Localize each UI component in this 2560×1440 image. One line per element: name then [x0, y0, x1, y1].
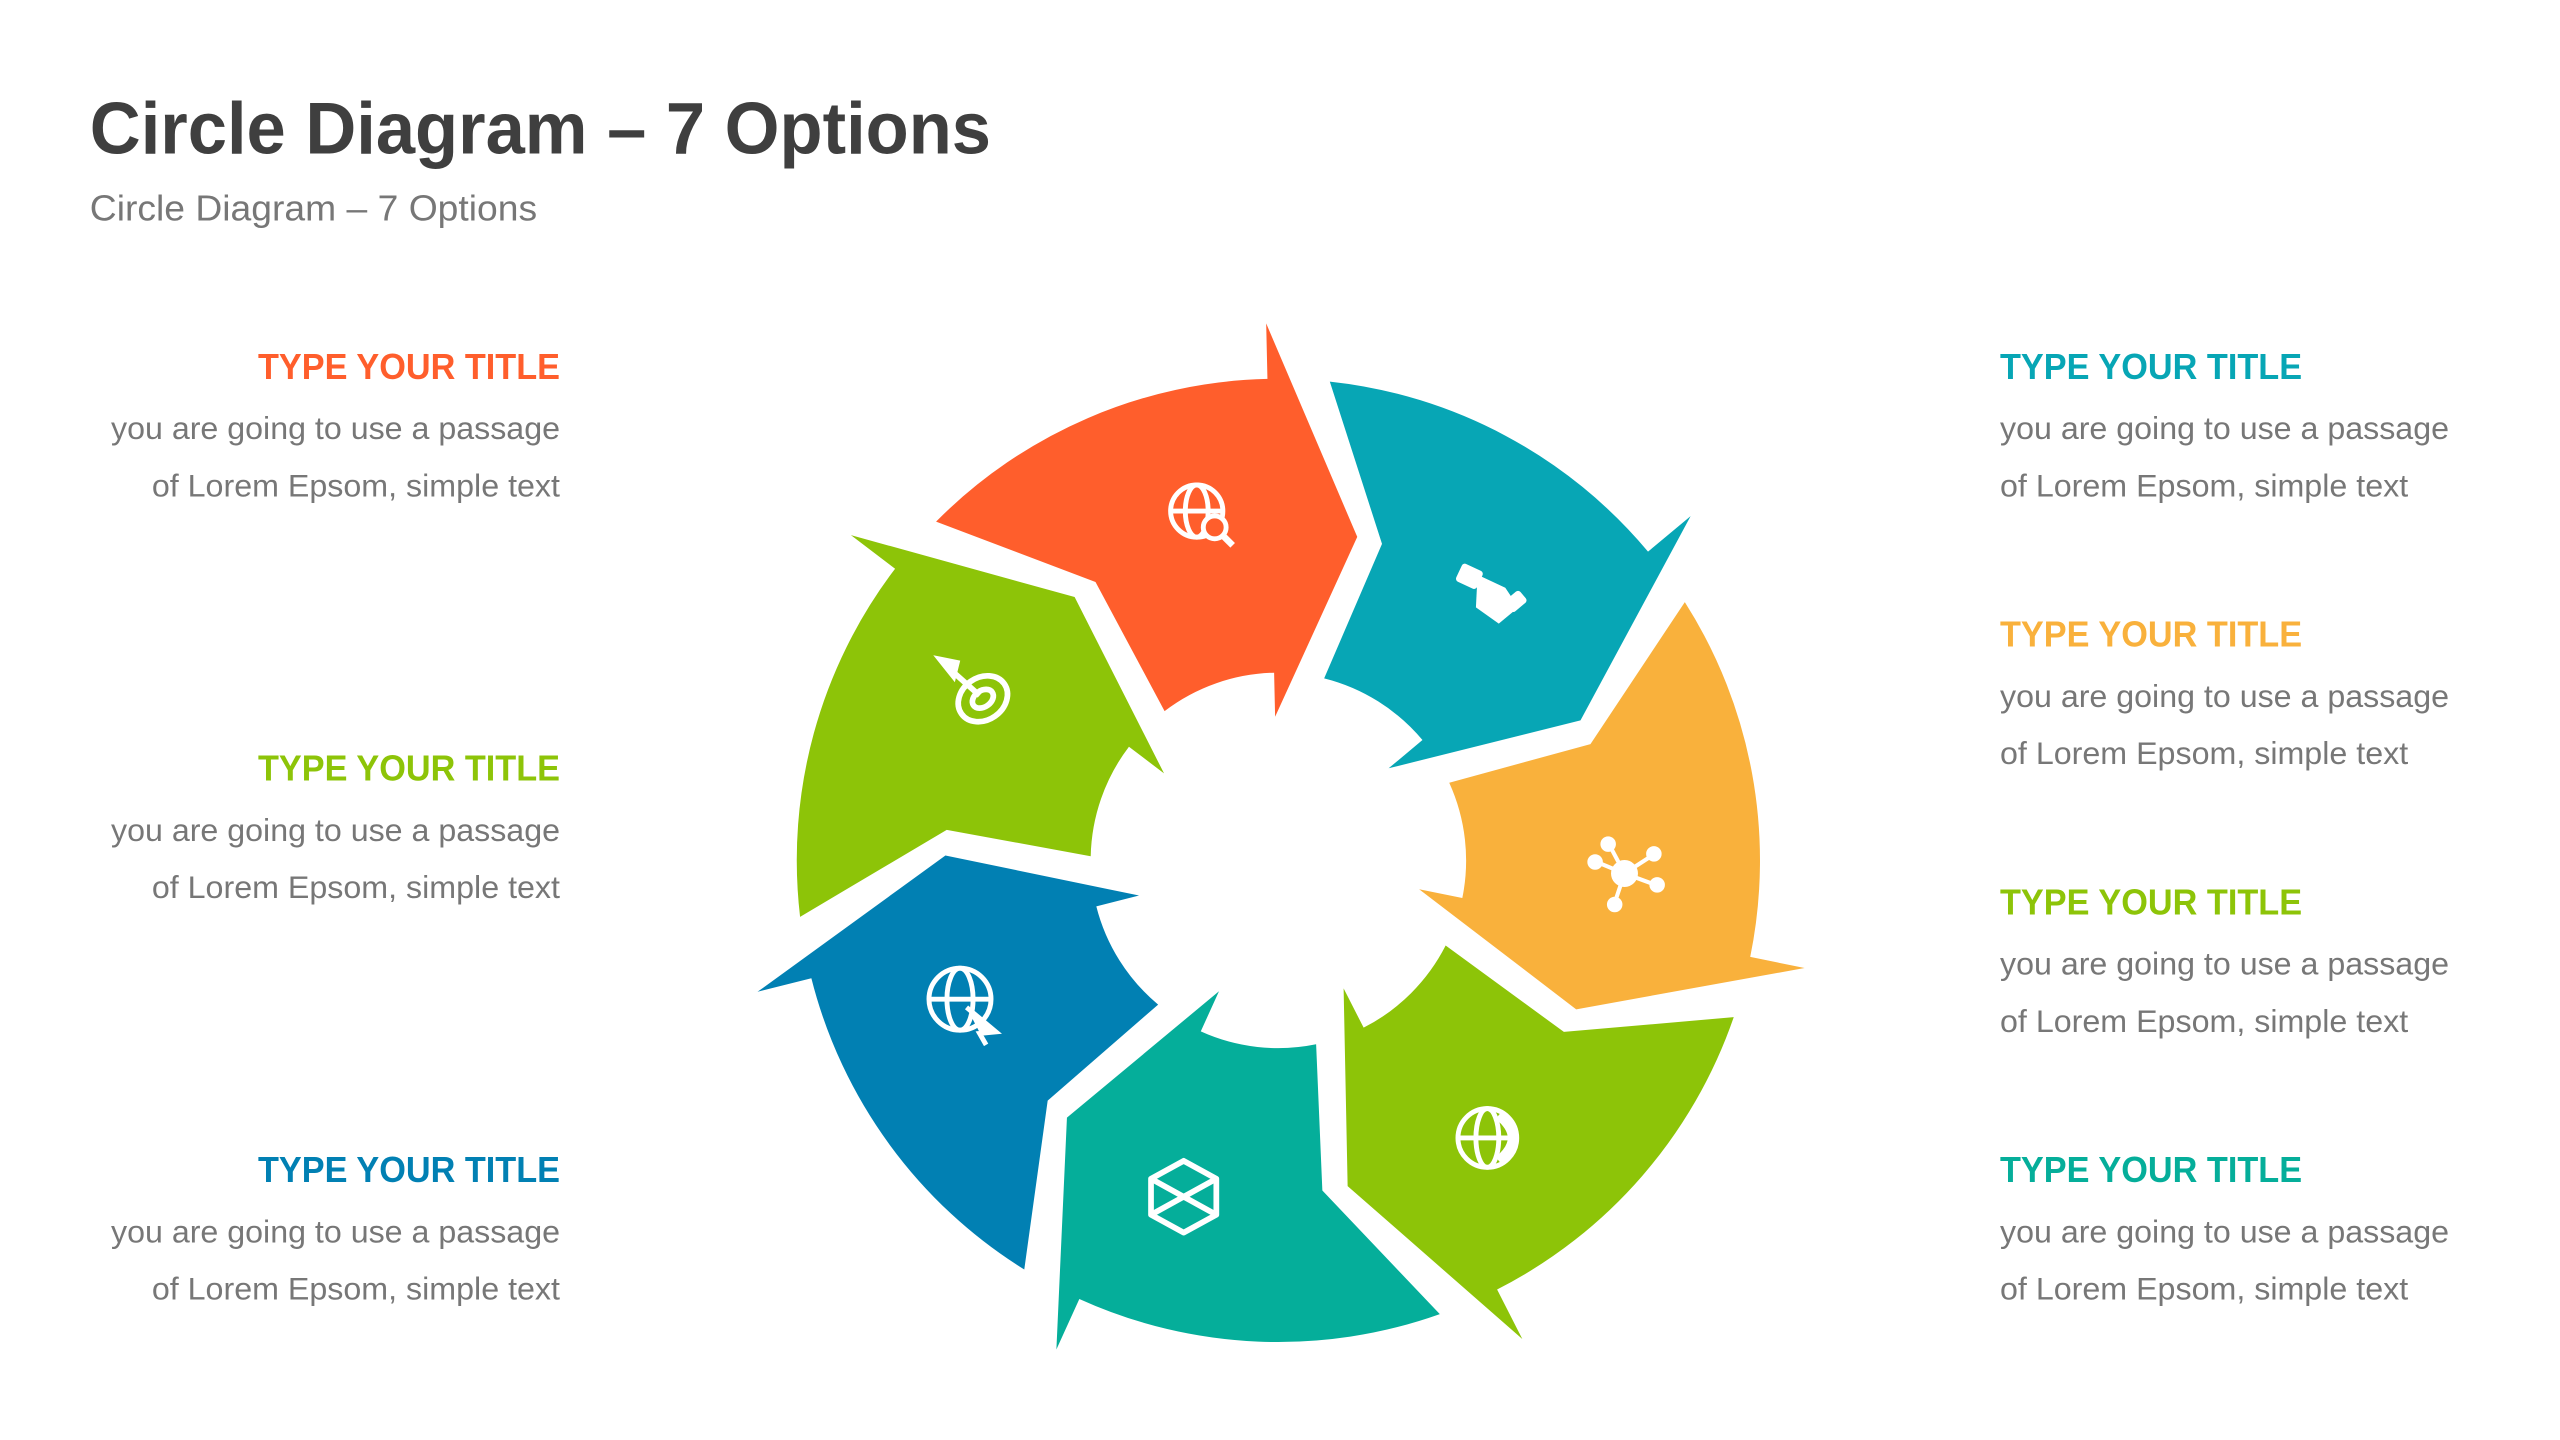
circle diagram — [648, 259, 1872, 1440]
text block: right 3: of Lorem Epsom, simple text — [2000, 1004, 2409, 1039]
text block: right 2: you are going to use a passage — [2000, 679, 2449, 714]
text block: right 1 — [2000, 346, 2449, 503]
icon: globe phone — [1458, 1109, 1517, 1167]
subtitle: Circle Diagram – 7 Options — [90, 187, 537, 228]
text block: right 4: of Lorem Epsom, simple text — [2000, 1272, 2409, 1307]
text block: left 3: you are going to use a passage — [111, 1214, 560, 1249]
text block: right 1: of Lorem Epsom, simple text — [2000, 468, 2409, 503]
text block: left 1 — [111, 346, 560, 503]
arrow: green right — [1267, 836, 1820, 1378]
text block: right 3 — [2000, 881, 2449, 1039]
text block: left 1: TYPE YOUR TITLE — [258, 346, 560, 387]
text block: right 4: TYPE YOUR TITLE — [2000, 1149, 2302, 1190]
icon: network — [1589, 838, 1663, 910]
text block: right 4: you are going to use a passage — [2000, 1214, 2449, 1249]
text block: right 2: of Lorem Epsom, simple text — [2000, 736, 2409, 771]
arrow: yellow — [1402, 561, 1872, 1053]
icon: handshake — [1455, 563, 1528, 624]
text block: right 4 — [2000, 1149, 2449, 1307]
text block: left 3: TYPE YOUR TITLE — [258, 1149, 560, 1190]
icon: cube — [1151, 1161, 1216, 1233]
text block: left 1: you are going to use a passage — [111, 411, 560, 446]
text block: left 2 — [111, 747, 560, 905]
arrow: blue — [736, 812, 1221, 1316]
arrow: green left — [648, 467, 1216, 1040]
text block: right 2: TYPE YOUR TITLE — [2000, 614, 2302, 655]
arrow: orange — [932, 321, 1361, 724]
text block: left 2: you are going to use a passage — [111, 813, 560, 848]
text block: left 2: TYPE YOUR TITLE — [258, 747, 560, 788]
text block: left 2: of Lorem Epsom, simple text — [152, 870, 560, 905]
text block: left 3 — [111, 1149, 560, 1307]
text block: right 2 — [2000, 614, 2449, 771]
icon: globe cursor — [929, 968, 996, 1045]
arrow: teal — [978, 956, 1524, 1440]
arrow: cyan — [1174, 259, 1746, 834]
text block: right 3: you are going to use a passage — [2000, 947, 2449, 982]
icon: target dart — [940, 660, 1016, 731]
text block: right 1: you are going to use a passage — [2000, 411, 2449, 446]
title: Circle Diagram – 7 Options — [90, 86, 991, 169]
text block: right 1: TYPE YOUR TITLE — [2000, 346, 2302, 387]
icon: globe search — [1171, 485, 1233, 545]
text block: right 3: TYPE YOUR TITLE — [2000, 881, 2302, 922]
text block: left 3: of Lorem Epsom, simple text — [152, 1272, 560, 1307]
text block: left 1: of Lorem Epsom, simple text — [152, 468, 560, 503]
